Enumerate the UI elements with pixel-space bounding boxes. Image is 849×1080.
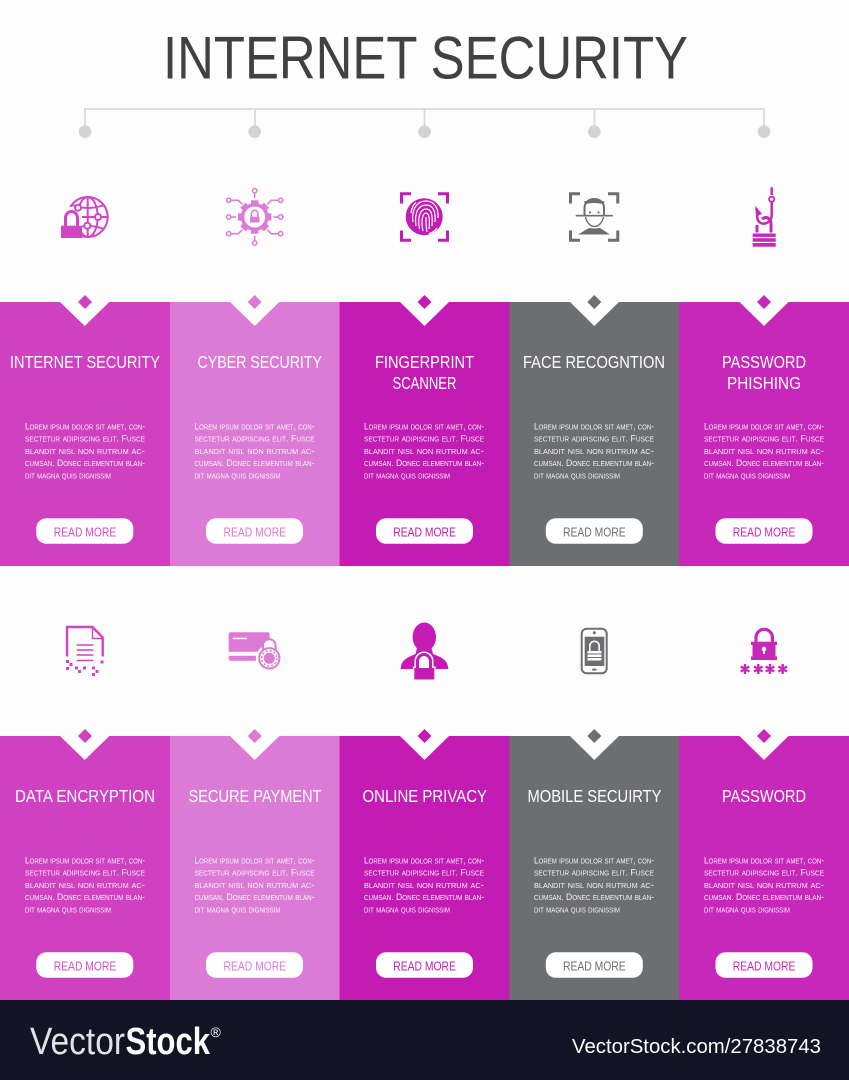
panel: password: READ MORE <box>733 960 795 974</box>
panel: mobile security <box>510 729 679 1000</box>
panel: fingerprint scanner: cumsan. Donec elementum blan- <box>364 458 484 469</box>
panel: cyber security <box>170 295 340 566</box>
panel: mobile security: READ MORE <box>563 960 626 974</box>
panel: password: PASSWORD <box>722 786 806 806</box>
icon: mobile security phone <box>582 629 607 673</box>
panel: mobile security: blandit nisl non rutrum ac- <box>534 880 654 891</box>
panel: online privacy: ONLINE PRIVACY <box>362 786 487 806</box>
panel: face recognition: Lorem ipsum dolor sit amet, con- <box>534 421 654 432</box>
panel: face recognition: sectetur adipiscing elit. Fusce <box>534 434 654 445</box>
panel: password: Lorem ipsum dolor sit amet, con- <box>704 855 824 866</box>
panel: secure payment: SECURE PAYMENT <box>188 786 322 806</box>
panel: online privacy: cumsan. Donec elementum blan- <box>364 892 484 903</box>
panel: password: dit magna quis dignissim <box>704 904 790 915</box>
panel: fingerprint scanner: READ MORE <box>393 526 456 540</box>
icon: data encryption document <box>66 627 104 676</box>
panel: fingerprint scanner: Lorem ipsum dolor sit amet, con- <box>364 421 484 432</box>
panel: mobile security: cumsan. Donec elementum blan- <box>534 892 654 903</box>
icon: secure payment card <box>229 632 283 672</box>
panel: secure payment <box>170 729 340 1000</box>
panel: data encryption: dit magna quis dignissim <box>25 904 111 915</box>
panel: fingerprint scanner: dit magna quis dignissim <box>364 470 450 481</box>
panel: cyber security: CYBER SECURITY <box>198 352 322 372</box>
icon: fingerprint scanner <box>402 194 448 240</box>
panel: face recognition: READ MORE <box>563 526 626 540</box>
panel: data encryption <box>0 729 170 1000</box>
panel: password phishing: Lorem ipsum dolor sit amet, con- <box>704 421 824 432</box>
panel: fingerprint scanner <box>340 295 510 566</box>
panel: secure payment: sectetur adipiscing elit. Fusce <box>194 868 315 879</box>
panel: password phishing: cumsan. Donec elementum blan- <box>704 458 824 469</box>
icon: globe with padlock <box>58 197 108 240</box>
panel: internet security: sectetur adipiscing elit. Fusce <box>25 434 145 445</box>
panel: fingerprint scanner: sectetur adipiscing elit. Fusce <box>364 434 484 445</box>
panel: password phishing: dit magna quis dignissim <box>704 470 790 481</box>
panel: online privacy: blandit nisl non rutrum ac- <box>364 880 484 891</box>
panel: internet security <box>0 295 170 566</box>
panel: internet security: READ MORE <box>54 526 116 540</box>
panel: cyber security: cumsan. Donec elementum blan- <box>194 458 314 469</box>
icon: face recognition <box>570 194 618 240</box>
panel: password <box>679 729 849 1000</box>
panel: internet security: cumsan. Donec elementum blan- <box>25 458 145 469</box>
panel: password phishing <box>679 295 849 566</box>
footer url: VectorStock.com/27838743 <box>572 1035 821 1058</box>
panel: password: sectetur adipiscing elit. Fusce <box>704 868 824 879</box>
panel: mobile security: dit magna quis dignissim <box>534 904 620 915</box>
panel: face recognition <box>510 295 679 566</box>
panel: password phishing: PHISHING <box>727 373 801 393</box>
footer logo: ® <box>210 1024 222 1040</box>
panel: password phishing: sectetur adipiscing elit. Fusce <box>704 434 824 445</box>
panel: internet security: INTERNET SECURITY <box>10 352 160 372</box>
panel: cyber security: dit magna quis dignissim <box>194 470 281 481</box>
panel: secure payment: READ MORE <box>224 960 286 974</box>
panel: data encryption: Lorem ipsum dolor sit amet, con- <box>25 855 145 866</box>
panel: cyber security: Lorem ipsum dolor sit amet, con- <box>194 421 314 432</box>
panel: online privacy: sectetur adipiscing elit. Fusce <box>364 868 484 879</box>
footer logo: Vector <box>30 1021 125 1063</box>
panel: internet security: blandit nisl non rutrum ac- <box>25 446 145 457</box>
panel: secure payment: blandit nisl non rutrum ac- <box>194 880 314 891</box>
footer bar <box>0 1000 849 1080</box>
panel: password: cumsan. Donec elementum blan- <box>704 892 824 903</box>
footer logo <box>30 1021 222 1063</box>
panel: secure payment: Lorem ipsum dolor sit amet, con- <box>194 855 314 866</box>
panel: data encryption: cumsan. Donec elementum blan- <box>25 892 145 903</box>
panel: cyber security: sectetur adipiscing elit. Fusce <box>194 434 315 445</box>
footer logo: Stock <box>126 1021 211 1063</box>
panel: fingerprint scanner: FINGERPRINT <box>375 352 474 372</box>
panel: password phishing: READ MORE <box>733 526 795 540</box>
panel: data encryption: DATA ENCRYPTION <box>15 786 155 806</box>
panel: face recognition: blandit nisl non rutrum ac- <box>534 446 654 457</box>
panel: mobile security: MOBILE SECUIRTY <box>528 786 662 806</box>
icon: online privacy person with padlock <box>401 622 448 680</box>
panel: cyber security: blandit nisl non rutrum ac- <box>194 446 314 457</box>
panel: online privacy <box>340 729 510 1000</box>
panel: secure payment: dit magna quis dignissim <box>194 904 281 915</box>
panel: online privacy: dit magna quis dignissim <box>364 904 450 915</box>
panel: secure payment: cumsan. Donec elementum blan- <box>194 892 314 903</box>
panel: password phishing: blandit nisl non rutrum ac- <box>704 446 824 457</box>
panel: data encryption: READ MORE <box>54 960 116 974</box>
panel: online privacy: Lorem ipsum dolor sit amet, con- <box>364 855 484 866</box>
panel: cyber security: READ MORE <box>224 526 286 540</box>
panel: password: blandit nisl non rutrum ac- <box>704 880 824 891</box>
icon: password phishing hook <box>753 187 776 247</box>
icon: gear with padlock and circuit <box>226 188 283 245</box>
panel: data encryption: blandit nisl non rutrum ac- <box>25 880 145 891</box>
panel: mobile security: Lorem ipsum dolor sit amet, con- <box>534 855 654 866</box>
panel: online privacy: READ MORE <box>393 960 456 974</box>
icon: password padlock with asterisks <box>741 629 787 674</box>
panel: fingerprint scanner: SCANNER <box>392 373 456 393</box>
panel: face recognition: dit magna quis dignissim <box>534 470 620 481</box>
panel: data encryption: sectetur adipiscing elit. Fusce <box>25 868 145 879</box>
panel: mobile security: sectetur adipiscing elit. Fusce <box>534 868 654 879</box>
timeline connector <box>79 109 770 138</box>
panel: internet security: dit magna quis dignissim <box>25 470 111 481</box>
panel: face recognition: cumsan. Donec elementum blan- <box>534 458 654 469</box>
title: INTERNET SECURITY <box>163 23 688 91</box>
panel: face recognition: FACE RECOGNTION <box>523 352 665 372</box>
panel: password phishing: PASSWORD <box>722 352 806 372</box>
panel: internet security: Lorem ipsum dolor sit amet, con- <box>25 421 145 432</box>
panel: fingerprint scanner: blandit nisl non rutrum ac- <box>364 446 484 457</box>
